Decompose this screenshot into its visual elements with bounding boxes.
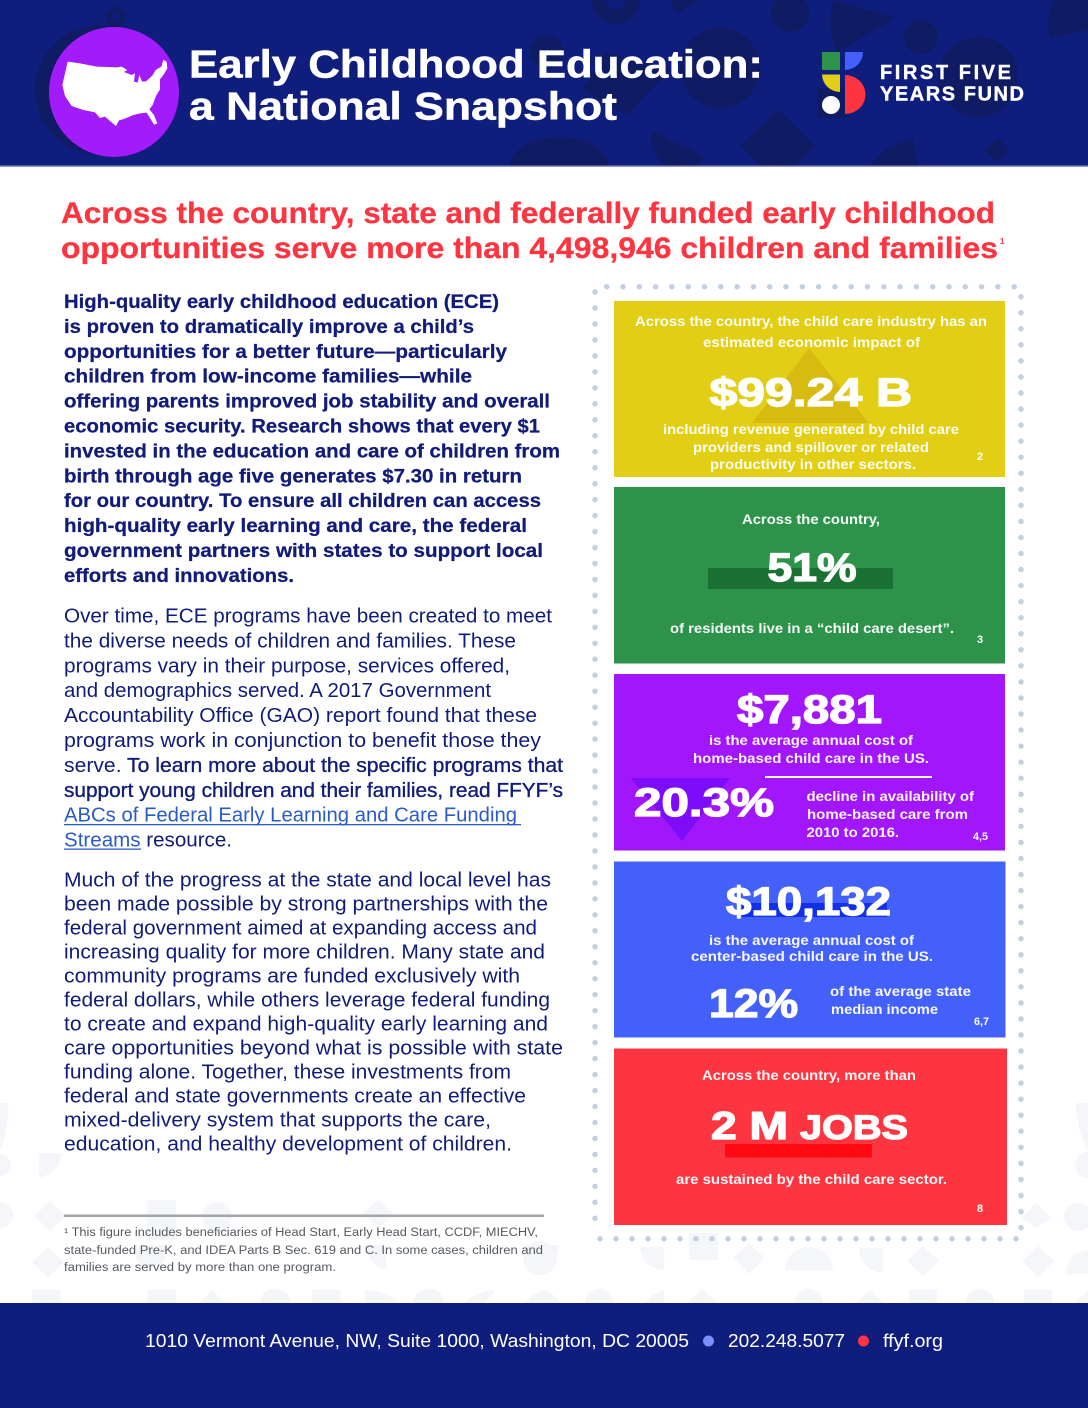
headline: opportunities serve more than 4,498,946 children and families xyxy=(61,232,998,265)
panel: center-based cost: of the average state xyxy=(830,983,971,999)
title xyxy=(189,44,763,128)
text block: partnerships: education, and healthy development of children. xyxy=(64,1134,512,1156)
panel: economic impact: including revenue generated by child care xyxy=(663,421,959,437)
footnote: ¹ This figure includes beneficiaries of Head Start, Early Head Start, CCDF, MIECHV, xyxy=(64,1227,538,1239)
panel: home-based cost xyxy=(614,674,1005,850)
title: Early Childhood Education: xyxy=(189,44,763,86)
panel: child care desert: of residents live in a “child care desert”. xyxy=(670,620,954,636)
panel: jobs: JOBS xyxy=(800,1109,908,1147)
panel: home-based cost: home-based care from xyxy=(807,806,968,822)
panel: economic impact: $99.24 B xyxy=(710,371,912,415)
text block: ECE programs xyxy=(64,606,563,852)
text block: partnerships: community programs are funded exclusively with xyxy=(64,966,520,988)
panel: home-based cost: is the average annual cost of xyxy=(709,732,913,748)
panel text: Across the country, more than xyxy=(702,1067,916,1083)
panel: home-based cost: 2010 to 2016. xyxy=(806,824,899,840)
text block: partnerships: Much of the progress at the state and local level has xyxy=(64,870,551,892)
text block: partnerships: to create and expand high-quality early learning and xyxy=(64,1014,548,1036)
dotted border xyxy=(595,287,1021,1239)
panel text: $7,881 xyxy=(737,688,882,732)
panel: center-based cost: median income xyxy=(831,1001,938,1017)
text block: ECE programs: programs work in conjunction to benefit those they xyxy=(64,730,541,752)
headline xyxy=(61,197,1005,265)
header bottom edge xyxy=(0,166,1088,167)
panel: jobs: 8 xyxy=(977,1203,983,1215)
text block: bold intro: government partners with states to support local xyxy=(64,540,543,562)
text block: bold intro xyxy=(64,291,560,587)
background pattern xyxy=(0,1103,1088,1303)
text block: partnerships: federal and state governments create an effective xyxy=(64,1086,526,1108)
text block: bold intro: invested in the education and care of children from xyxy=(64,440,560,462)
footnote: state-funded Pre-K, and IDEA Parts B Sec. 619 and C. In some cases, children and xyxy=(64,1245,543,1257)
title: a National Snapshot xyxy=(189,86,617,128)
text block: ECE programs: and demographics served. A 2017 Government xyxy=(64,680,491,702)
header background shapes xyxy=(35,0,1088,166)
website: ffyf.org xyxy=(883,1331,943,1351)
text block: bold intro: children from low-income families—while xyxy=(64,366,472,388)
panel: center-based cost: is the average annual cost of xyxy=(709,932,914,948)
phone: 202.248.5077 xyxy=(728,1331,845,1351)
text block: bold intro: is proven to dramatically improve a child’s xyxy=(64,316,474,338)
panel: economic impact: estimated economic impact of xyxy=(703,334,920,350)
panel: economic impact: providers and spillover or related xyxy=(693,439,929,455)
text block: partnerships: funding alone. Together, these investments from xyxy=(64,1062,511,1084)
panel: home-based cost: decline in availability of xyxy=(806,788,974,804)
triangle accent xyxy=(752,348,869,423)
panel: child care desert: 51% xyxy=(768,546,856,590)
text block: ECE programs: programs vary in their purpose, services offered, xyxy=(64,655,510,677)
panel text: Across the country, xyxy=(742,511,880,527)
text block: partnerships: federal dollars, while others leverage federal funding xyxy=(64,990,550,1012)
panel: center-based cost: 12% xyxy=(709,982,798,1026)
logo: First Five Years Fund: YEARS FUND xyxy=(880,84,1024,106)
icon: purple circle with US map xyxy=(49,27,179,157)
text block: bold intro: opportunities for a better future—particularly xyxy=(64,341,507,363)
text block: partnerships xyxy=(64,870,563,1156)
bar accent xyxy=(708,568,893,589)
text block: bold intro: high-quality early learning and care, the federal xyxy=(64,515,527,537)
panel: home-based cost: 20.3% xyxy=(634,781,774,825)
bar accent xyxy=(725,1144,872,1158)
panel: economic impact: 2 xyxy=(977,451,983,463)
text block: bold intro: offering parents improved job stability and overall xyxy=(64,391,550,413)
panel: center-based cost: 6,7 xyxy=(974,1016,989,1028)
panel: jobs: are sustained by the child care sector. xyxy=(676,1171,947,1187)
footnote: families are served by more than one program. xyxy=(64,1262,336,1274)
text block: partnerships: been made possible by strong partnerships with the xyxy=(64,894,548,916)
text block: partnerships: mixed-delivery system that supports the care, xyxy=(64,1110,491,1132)
text block: ECE programs: serve. To learn more about the specific programs that xyxy=(64,755,563,777)
panel text: $10,132 xyxy=(726,880,891,924)
text block: ECE programs: support young children and their families, read FFYF’s xyxy=(64,780,563,802)
text block: partnerships: care opportunities beyond what is possible with state xyxy=(64,1038,563,1060)
text block: bold intro: for our country. To ensure all children can access xyxy=(64,490,541,512)
text block: ECE programs: Accountability Office (GAO) report found that these xyxy=(64,705,537,727)
text block: ECE programs: Streams resource. xyxy=(64,830,232,852)
panel: jobs: 2 M xyxy=(711,1105,788,1148)
text block: partnerships: federal government aimed at expanding access and xyxy=(64,918,537,940)
panel text: Across the country, the child care industry has an xyxy=(635,313,987,329)
bar accent xyxy=(742,903,887,917)
logo: First Five Years Fund xyxy=(822,52,1024,114)
text block: ECE programs: ABCs of Federal Early Learning and Care Funding xyxy=(64,805,517,827)
panel: center-based cost: center-based child care in the US. xyxy=(691,948,933,964)
red dot xyxy=(858,1336,869,1346)
panel: home-based cost: 4,5 xyxy=(973,831,988,843)
logo: First Five Years Fund: FIRST FIVE xyxy=(880,62,1011,84)
panel: child care desert xyxy=(614,487,1005,664)
text block: ECE programs: Over time, ECE programs have been created to meet xyxy=(64,606,552,628)
panel: home-based cost: home-based child care in the US. xyxy=(693,750,929,766)
panel: economic impact: productivity in other sectors. xyxy=(710,456,916,472)
headline: 1 xyxy=(1000,237,1005,246)
panel: child care desert: 3 xyxy=(977,634,983,646)
headline: Across the country, state and federally funded early childhood xyxy=(61,197,995,230)
blue dot xyxy=(703,1336,714,1346)
footnote xyxy=(64,1214,544,1274)
text block: bold intro: economic security. Research shows that every $1 xyxy=(64,416,540,438)
header band xyxy=(0,0,1088,167)
text block: bold intro: efforts and innovations. xyxy=(64,565,294,587)
panel: economic impact xyxy=(614,301,1005,477)
text block: bold intro: High-quality early childhood education (ECE) xyxy=(64,291,499,313)
address: 1010 Vermont Avenue, NW, Suite 1000, Washington, DC 20005 xyxy=(145,1331,689,1351)
panel: center-based cost xyxy=(614,862,1006,1038)
text block: ECE programs: the diverse needs of children and families. These xyxy=(64,630,516,652)
text block: partnerships: increasing quality for more children. Many state and xyxy=(64,942,545,964)
triangle accent xyxy=(631,778,730,841)
footer band xyxy=(0,1303,1088,1408)
panel: jobs xyxy=(614,1048,1007,1225)
text block: bold intro: birth through age five generates $7.30 in return xyxy=(64,465,522,487)
